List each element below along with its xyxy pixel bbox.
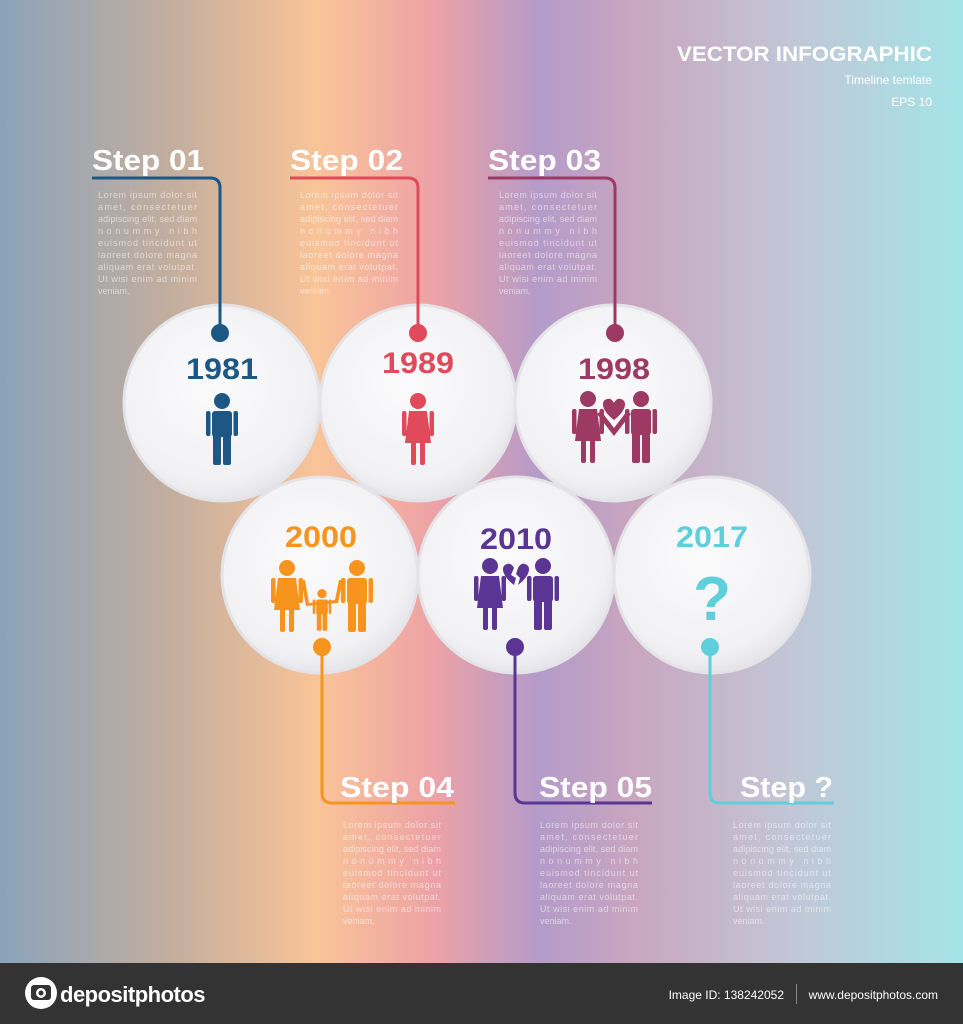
title block: EPS 10: [891, 95, 932, 109]
step 03 text: adipiscing elit, sed diam: [499, 214, 597, 224]
step 02 text: adipiscing elit, sed diam: [300, 214, 398, 224]
circle: 1981: 1981: [186, 353, 258, 386]
step 04 text: Ut wisi enim ad minim: [343, 904, 441, 914]
step 04 text: [340, 772, 454, 926]
step 05 text: Ut wisi enim ad minim: [540, 904, 638, 914]
step ? text: adipiscing elit, sed diam: [733, 844, 831, 854]
step ? text: veniam.: [733, 916, 765, 926]
step 03 text: laoreet dolore magna: [499, 250, 597, 260]
step 03 text: euismod tincidunt ut: [499, 238, 597, 248]
step 02 text: [290, 145, 403, 296]
circle: 1989: 1989: [382, 347, 454, 380]
circle: 1998: 1998: [578, 353, 650, 386]
step ? text: Step ?: [740, 772, 833, 804]
step 04 text: aliquam erat volutpat.: [343, 892, 441, 902]
title block: VECTOR INFOGRAPHIC: [677, 43, 932, 66]
circle: 2017: 2017: [676, 521, 748, 554]
step 03 text: [488, 145, 601, 296]
circle: 1989: [320, 305, 516, 501]
step ? text: Ut wisi enim ad minim: [733, 904, 831, 914]
step 01 text: Ut wisi enim ad minim: [98, 274, 197, 284]
step ? text: Lorem ipsum dolor sit: [733, 820, 831, 830]
connector: step 05: [506, 638, 652, 803]
step 01 text: nonummy nibh: [98, 226, 197, 236]
step 03 text: aliquam erat volutpat.: [499, 262, 597, 272]
title block: Timeline temlate: [844, 73, 932, 87]
connector: step ?: [701, 638, 834, 803]
step 02 text: laoreet dolore magna: [300, 250, 398, 260]
step 02 text: nonummy nibh: [300, 226, 398, 236]
step 02 text: aliquam erat volutpat.: [300, 262, 398, 272]
step 01 text: Step 01: [92, 145, 204, 177]
step ? text: amet, consectetuer: [733, 832, 831, 842]
footer bar: www.depositphotos.com: [808, 988, 938, 1002]
step 02 text: euismod tincidunt ut: [300, 238, 398, 248]
step 03 text: amet, consectetuer: [499, 202, 597, 212]
step ? text: nonummy nibh: [733, 856, 831, 866]
step 05 text: [539, 772, 652, 926]
step 04 text: adipiscing elit, sed diam: [343, 844, 441, 854]
step 04 text: veniam.: [343, 916, 375, 926]
connector: step 02: [290, 178, 427, 342]
step 05 text: Step 05: [539, 772, 652, 804]
footer bar: depositphotos: [60, 982, 205, 1007]
circle: 2017: ?: [693, 565, 731, 634]
step 02 text: Lorem ipsum dolor sit: [300, 190, 398, 200]
step 02 text: Ut wisi enim ad minim: [300, 274, 398, 284]
step 01 text: [92, 145, 204, 296]
step 02 text: Step 02: [290, 145, 403, 177]
step 05 text: aliquam erat volutpat.: [540, 892, 638, 902]
connector: step 03: [488, 178, 624, 342]
title block: [677, 43, 932, 109]
step 03 text: Step 03: [488, 145, 601, 177]
step 01 text: Lorem ipsum dolor sit: [98, 190, 197, 200]
circle: 1998: [515, 305, 711, 501]
step 05 text: Lorem ipsum dolor sit: [540, 820, 638, 830]
step ? text: [733, 772, 833, 926]
step 04 text: Lorem ipsum dolor sit: [343, 820, 441, 830]
circle: 2000: [222, 477, 418, 673]
step 05 text: veniam.: [540, 916, 572, 926]
step 05 text: amet, consectetuer: [540, 832, 638, 842]
step 02 text: amet, consectetuer: [300, 202, 398, 212]
connector: step 01: [92, 178, 229, 342]
footer bar: Image ID: 138242052: [669, 988, 784, 1002]
step ? text: laoreet dolore magna: [733, 880, 831, 890]
step ? text: aliquam erat volutpat.: [733, 892, 831, 902]
icon: depositphotos logo: [25, 977, 57, 1009]
step ? text: euismod tincidunt ut: [733, 868, 831, 878]
step 01 text: aliquam erat volutpat.: [98, 262, 197, 272]
step 04 text: euismod tincidunt ut: [343, 868, 441, 878]
step 02 text: veniam.: [300, 286, 332, 296]
step 01 text: laoreet dolore magna: [98, 250, 197, 260]
footer bar: [0, 963, 963, 1024]
circle: 2010: 2010: [480, 523, 552, 556]
circle: 2010: [418, 477, 614, 673]
step 01 text: adipiscing elit, sed diam: [98, 214, 197, 224]
step 05 text: adipiscing elit, sed diam: [540, 844, 638, 854]
step 03 text: Ut wisi enim ad minim: [499, 274, 597, 284]
step 01 text: amet, consectetuer: [98, 202, 197, 212]
circle: 1981: [124, 305, 320, 501]
step 03 text: Lorem ipsum dolor sit: [499, 190, 597, 200]
step 01 text: euismod tincidunt ut: [98, 238, 197, 248]
step 03 text: nonummy nibh: [499, 226, 597, 236]
step 03 text: veniam.: [499, 286, 531, 296]
step 04 text: laoreet dolore magna: [343, 880, 441, 890]
step 04 text: nonummy nibh: [343, 856, 441, 866]
step 05 text: laoreet dolore magna: [540, 880, 638, 890]
connector: step 04: [313, 638, 455, 803]
step 04 text: amet, consectetuer: [343, 832, 441, 842]
step 05 text: nonummy nibh: [540, 856, 638, 866]
step 05 text: euismod tincidunt ut: [540, 868, 638, 878]
step 04 text: Step 04: [340, 772, 454, 804]
circle: 2017: [614, 477, 810, 673]
circle: 2000: 2000: [285, 521, 357, 554]
step 01 text: veniam.: [98, 286, 130, 296]
